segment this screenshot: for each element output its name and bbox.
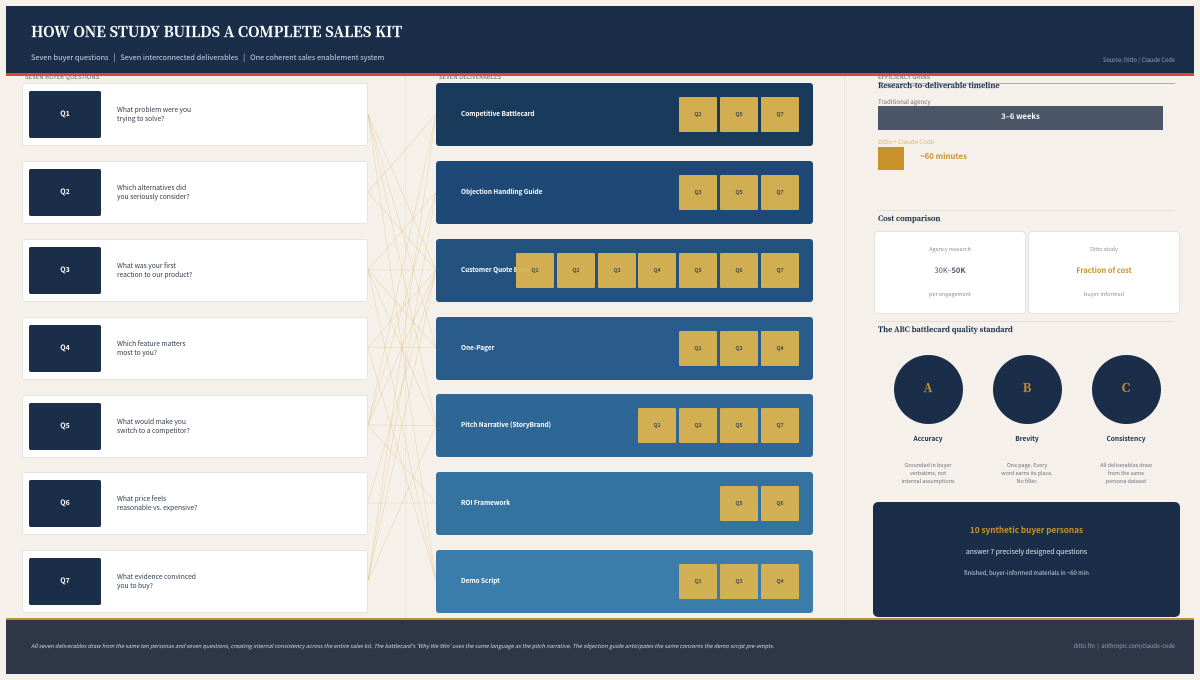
question card Q6: reasonable vs. expensive? <box>117 502 197 512</box>
circle B <box>992 355 1062 424</box>
deliverable: Pitch Narrative: Q7 <box>776 421 784 429</box>
header band <box>6 6 1194 76</box>
description: consistency: All deliverables draw <box>1100 461 1152 469</box>
deliverable: One-Pager: Q1 <box>694 344 702 352</box>
question card Q2: Q2 <box>60 187 70 197</box>
deliverable: Customer Quote Bank: Q6 <box>735 266 742 274</box>
deliverable: Pitch Narrative: Pitch Narrative (StoryBrand) <box>461 420 551 429</box>
circle C: C <box>1122 379 1130 396</box>
deliverable: Customer Quote Bank: Q4 <box>653 266 660 274</box>
deliverable: One-Pager: Q3 <box>735 344 742 352</box>
description: accuracy <box>901 461 955 485</box>
card: ditto study cost: buyer-informed <box>1084 290 1124 298</box>
description: brevity <box>1001 461 1053 485</box>
deliverable: Customer Quote Bank <box>436 239 813 302</box>
deliverable: One-Pager: One-Pager <box>461 342 494 352</box>
deliverable: ROI Framework: Q6 <box>776 499 784 507</box>
deliverable: ROI Framework: Q5 <box>735 499 742 507</box>
question card Q5: switch to a competitor? <box>117 425 190 435</box>
heading: cost comparison: Cost comparison <box>878 214 940 224</box>
deliverable: Objection Handling Guide: Q5 <box>735 188 742 196</box>
value: 60 minutes: ~60 minutes <box>920 151 967 162</box>
question card Q5: What would make you <box>117 416 186 426</box>
description: accuracy: Grounded in buyer <box>905 461 951 469</box>
deliverable: Objection Handling Guide <box>436 161 813 224</box>
heading: efficiency gains: EFFICIENCY GAINS <box>878 72 930 81</box>
footer band <box>6 618 1194 674</box>
callout line: answer 7 precisely designed questions <box>966 546 1087 556</box>
bar: traditional 3-6 weeks: 3–6 weeks <box>1001 111 1040 122</box>
question card Q6: Q6 <box>60 498 70 508</box>
heading: abc standard: The ABC battlecard quality standard <box>878 325 1013 335</box>
card: agency research cost: Agency research <box>929 245 971 253</box>
circle B: B <box>1023 379 1031 396</box>
question card Q6 <box>22 472 368 535</box>
deliverable: Demo Script <box>436 550 813 613</box>
deliverable: Demo Script: Q1 <box>694 577 702 585</box>
question card Q4: most to you? <box>117 347 157 357</box>
deliverable: Competitive Battlecard: Q7 <box>776 110 784 118</box>
card: agency research cost: 30K–50K <box>935 265 965 276</box>
question card Q1: Q1 <box>60 109 70 119</box>
deliverable: Competitive Battlecard: Q2 <box>694 110 702 118</box>
question card Q1: trying to solve? <box>117 113 164 123</box>
deliverable: Customer Quote Bank: Q5 <box>694 266 702 274</box>
label: consistency: Consistency <box>1106 433 1146 443</box>
card: ditto study cost: Ditto study <box>1090 245 1118 253</box>
deliverable: One-Pager: Q4 <box>776 344 784 352</box>
description: accuracy: verbatims, not <box>910 469 946 477</box>
card: ditto study cost <box>1028 231 1180 314</box>
divider <box>878 83 1175 84</box>
question card Q3: reaction to our product? <box>117 269 192 279</box>
card: agency research cost: per engagement <box>929 290 971 298</box>
deliverable: Customer Quote Bank: Q3 <box>613 266 620 274</box>
callout headline: 10 synthetic buyer personas <box>970 524 1083 536</box>
deliverable: Pitch Narrative <box>436 394 813 457</box>
source: Source: Ditto / Claude Code <box>1103 55 1175 64</box>
description: brevity: One page. Every <box>1007 461 1047 469</box>
divider <box>878 321 1175 322</box>
question card Q7: What evidence convinced <box>117 571 196 581</box>
heading: seven buyer questions: SEVEN BUYER QUESTIONS <box>25 72 99 81</box>
deliverable: Objection Handling Guide: Objection Handling Guide <box>461 187 542 196</box>
question card Q4: Q4 <box>60 342 70 352</box>
heading: timeline: Research-to-deliverable timeline <box>878 81 1000 91</box>
deliverable: Competitive Battlecard <box>436 83 813 146</box>
question card Q2: Which alternatives did <box>117 182 186 192</box>
deliverable: Customer Quote Bank: Q1 <box>531 266 538 274</box>
deliverable: Objection Handling Guide: Q7 <box>776 188 784 196</box>
description: accuracy: internal assumptions <box>901 477 955 485</box>
question card Q2 <box>22 161 368 224</box>
deliverable: One-Pager <box>436 316 813 380</box>
question card Q5 <box>22 394 368 458</box>
subtitle: Seven buyer questions | Seven interconnected deliverables | One coherent sales enablement system <box>31 52 384 63</box>
question card Q4 <box>22 316 368 380</box>
label: brevity: Brevity <box>1015 433 1039 443</box>
description: consistency: from the same <box>1108 469 1144 477</box>
description: consistency: persona dataset <box>1106 477 1146 485</box>
divider <box>878 210 1175 211</box>
question card Q4: Which feature matters <box>117 338 185 348</box>
question card Q7: you to buy? <box>117 580 153 590</box>
deliverable: Customer Quote Bank: Customer Quote Bank <box>461 265 530 274</box>
description: consistency <box>1100 461 1152 485</box>
question card Q5: Q5 <box>60 420 70 430</box>
deliverable: Demo Script: Q4 <box>776 577 784 585</box>
callout note: finished, buyer-informed materials in ~60 min <box>964 568 1089 577</box>
question card Q1 <box>22 83 368 146</box>
circle C <box>1092 355 1160 424</box>
deliverable: Pitch Narrative: Q5 <box>735 421 742 429</box>
label: ditto + claude code: Ditto + Claude Code <box>878 137 934 146</box>
question card Q3: What was your first <box>117 260 176 270</box>
bar: ditto 60 minutes <box>878 147 904 170</box>
deliverable: Customer Quote Bank: Q7 <box>776 266 784 274</box>
question card Q7: Q7 <box>60 576 70 586</box>
title: HOW ONE STUDY BUILDS A COMPLETE SALES KIT <box>31 21 402 42</box>
label: accuracy: Accuracy <box>913 433 943 443</box>
heading: seven deliverables: SEVEN DELIVERABLES <box>439 72 501 81</box>
question card Q2: you seriously consider? <box>117 191 189 201</box>
card: ditto study cost: Fraction of cost <box>1076 265 1132 276</box>
bar: traditional 3-6 weeks <box>878 106 1163 130</box>
deliverable: Demo Script: Q3 <box>735 577 742 585</box>
deliverable: Pitch Narrative: Q1 <box>653 421 660 429</box>
callout: synthetic personas <box>873 502 1180 617</box>
description: brevity: No filler. <box>1017 477 1037 485</box>
card: agency research cost <box>874 231 1026 314</box>
deliverable: Customer Quote Bank: Q2 <box>572 266 580 274</box>
deliverable: Demo Script: Demo Script <box>461 576 500 585</box>
question card Q1: What problem were you <box>117 104 191 114</box>
label: traditional agency: Traditional agency <box>878 97 931 106</box>
question card Q6: What price feels <box>117 493 166 503</box>
circle A <box>894 355 962 424</box>
circle A: A <box>924 379 932 396</box>
deliverable: Pitch Narrative: Q3 <box>694 421 702 429</box>
deliverable: ROI Framework: ROI Framework <box>461 498 510 507</box>
question card Q3: Q3 <box>60 265 70 275</box>
deliverable: Competitive Battlecard: Competitive Battlecard <box>461 109 535 118</box>
footer links: ditto.fm | anthropic.com/claude-code <box>1073 641 1175 650</box>
deliverable: ROI Framework <box>436 472 813 535</box>
description: brevity: word earns its place. <box>1001 469 1053 477</box>
question card Q7 <box>22 550 368 613</box>
question card Q3 <box>22 239 368 302</box>
deliverable: Objection Handling Guide: Q3 <box>694 188 702 196</box>
footer note: All seven deliverables draw from the same ten personas and seven questions, creating internal consistency across the entire sales kit. The battlecard's 'Why We Win' uses the same language as the pitch narrative. The objection guide anticipates the same concerns the demo script pre-empts. <box>31 642 774 650</box>
deliverable: Competitive Battlecard: Q5 <box>735 110 742 118</box>
